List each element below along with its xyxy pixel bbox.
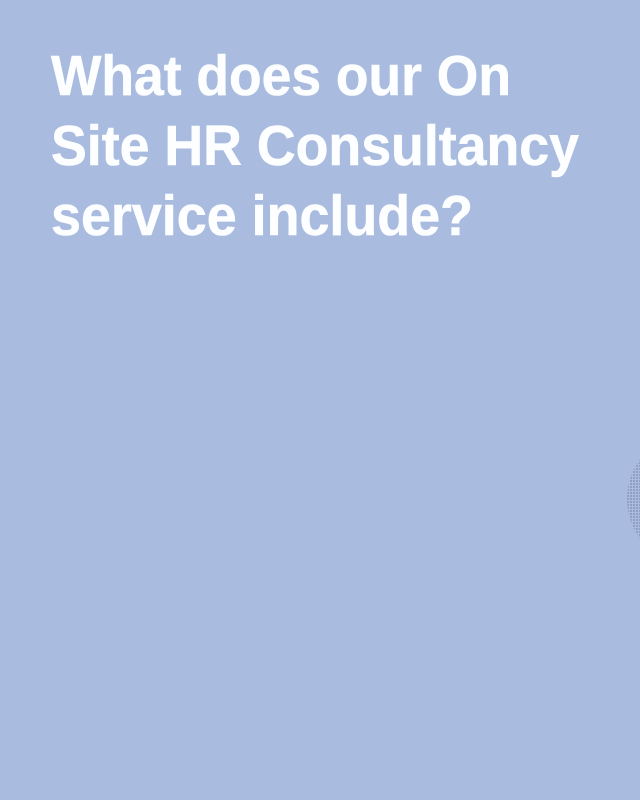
title: Site HR Consultancy <box>51 114 579 178</box>
title: service include? <box>51 184 473 248</box>
dotted circle partly off the right edge <box>627 433 640 565</box>
title <box>51 44 579 248</box>
title: What does our On <box>51 44 511 108</box>
